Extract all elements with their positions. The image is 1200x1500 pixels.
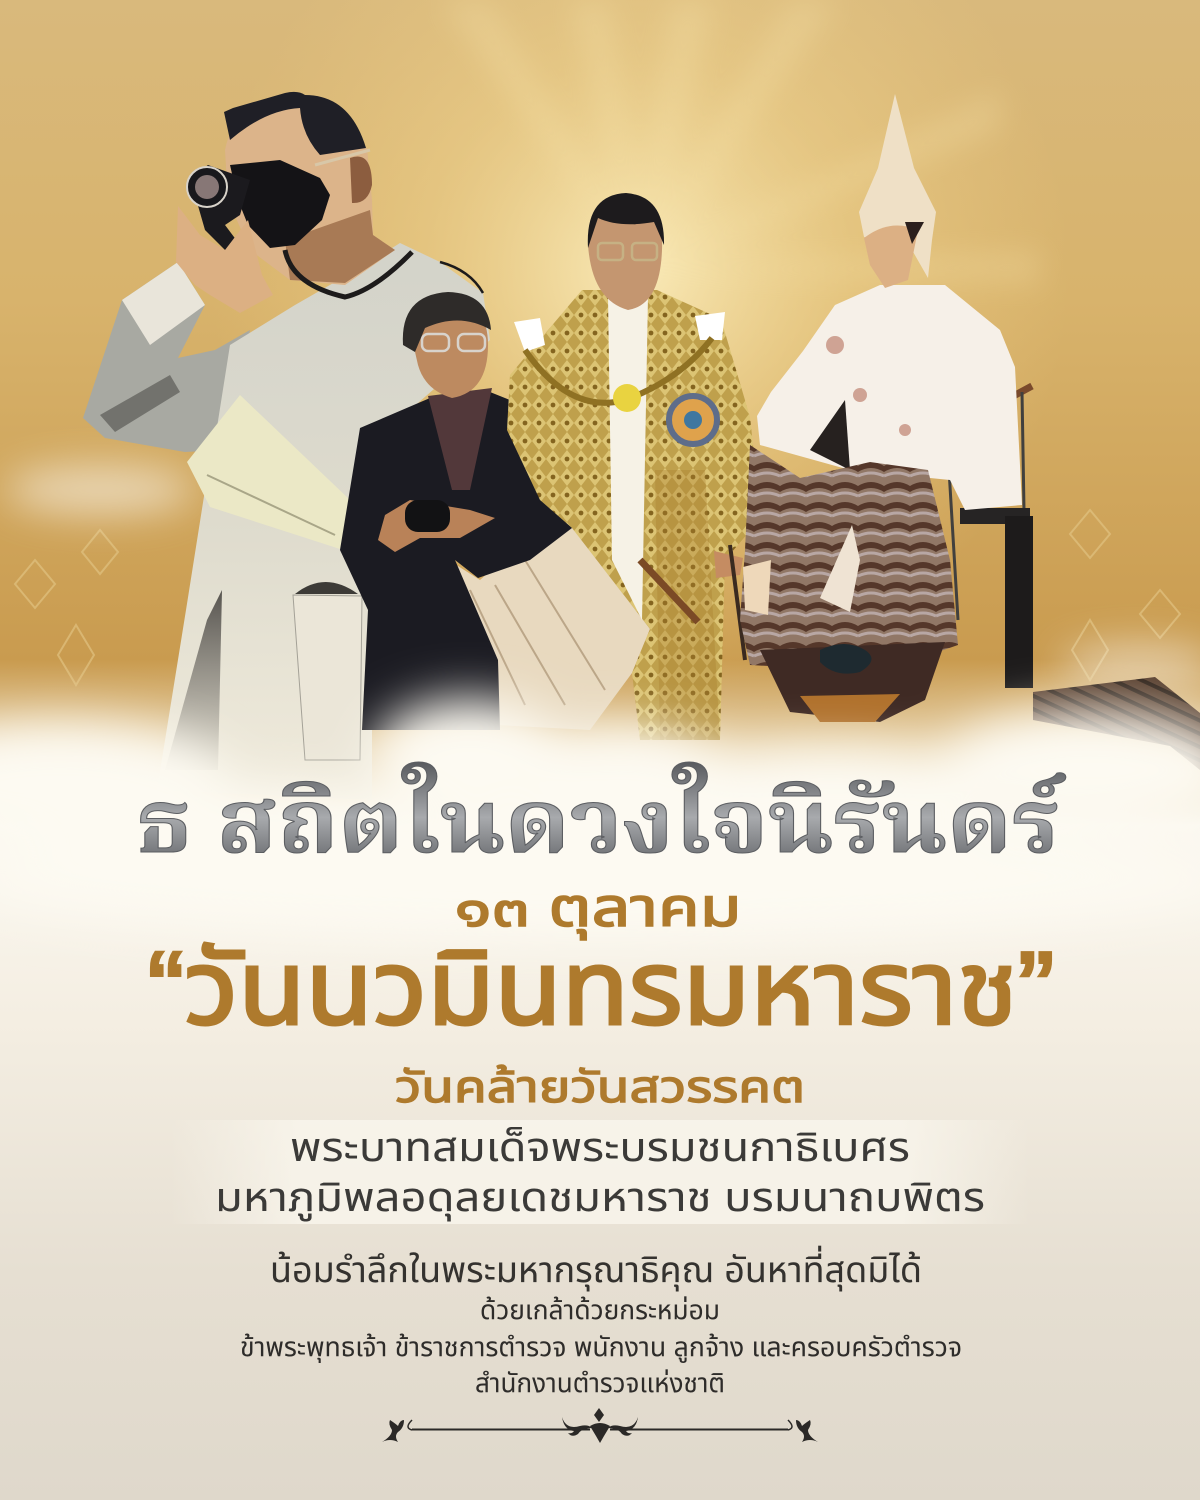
subheading: วันคล้ายวันสวรรคต xyxy=(395,1063,805,1112)
neck and head xyxy=(225,98,395,285)
hand and sword xyxy=(640,560,698,622)
hand xyxy=(176,206,273,313)
main heading: “วันนวมินทรมหาราช” xyxy=(148,931,1054,1047)
hair xyxy=(224,92,366,155)
gap between legs xyxy=(820,525,860,612)
strap xyxy=(285,250,412,297)
crown xyxy=(859,94,936,278)
face xyxy=(588,198,662,310)
jacket xyxy=(340,392,572,730)
glasses xyxy=(598,243,657,260)
dedication line: ด้วยเกล้าด้วยกระหม่อม xyxy=(480,1295,720,1325)
cloud bank xyxy=(0,698,1200,940)
white shirt xyxy=(608,296,648,620)
distant cloud wisps xyxy=(5,466,1200,685)
figure: man in black jacket xyxy=(340,292,650,730)
ear xyxy=(350,157,372,203)
royal title line one: พระบาทสมเด็จพระบรมชนกาธิเบศร xyxy=(290,1126,910,1170)
chair xyxy=(945,386,1032,433)
figure: seated king in crown xyxy=(740,94,1033,722)
ornamental divider xyxy=(382,1408,818,1443)
staff line: ข้าพระพุทธเจ้า ข้าราชการตำรวจ พนักงาน ลูกจ้าง และครอบครัวตำรวจ xyxy=(240,1332,962,1363)
date line: ๑๓ ตุลาคม xyxy=(454,878,742,940)
pocket xyxy=(293,595,362,760)
coat xyxy=(157,243,490,800)
face xyxy=(410,300,488,398)
glasses xyxy=(422,334,485,351)
agency line: สำนักงานตำรวจแห่งชาติ xyxy=(475,1368,725,1398)
ribbons xyxy=(514,318,545,352)
faint thai ornaments xyxy=(15,510,1180,685)
title: silver heading: ธ สถิตในดวงใจนิรันดร์ xyxy=(136,763,1067,872)
shirt xyxy=(428,388,492,490)
medal xyxy=(669,396,717,444)
tribute line: น้อมรำลึกในพระมหากรุณาธิคุณ อันหาที่สุดมิได้ xyxy=(270,1245,922,1291)
figure: man in gold robe xyxy=(507,193,761,740)
highlight band behind royal title xyxy=(170,1120,1030,1224)
lower garment xyxy=(740,445,958,672)
royal title line two: มหาภูมิพลอดุลยเดชมหาราช บรมนาถบพิตร xyxy=(215,1176,985,1221)
roof corner xyxy=(1033,677,1200,770)
face xyxy=(864,226,918,288)
robe xyxy=(757,285,1022,510)
chain xyxy=(525,338,712,403)
hands and camera xyxy=(378,500,495,552)
base xyxy=(760,642,945,722)
map bundle xyxy=(450,502,650,730)
folded map xyxy=(187,395,350,549)
sun glow and rays xyxy=(180,0,1100,720)
camera xyxy=(230,160,330,248)
figure: photographer in grey suit xyxy=(83,92,490,800)
arm and sleeve xyxy=(83,262,250,452)
